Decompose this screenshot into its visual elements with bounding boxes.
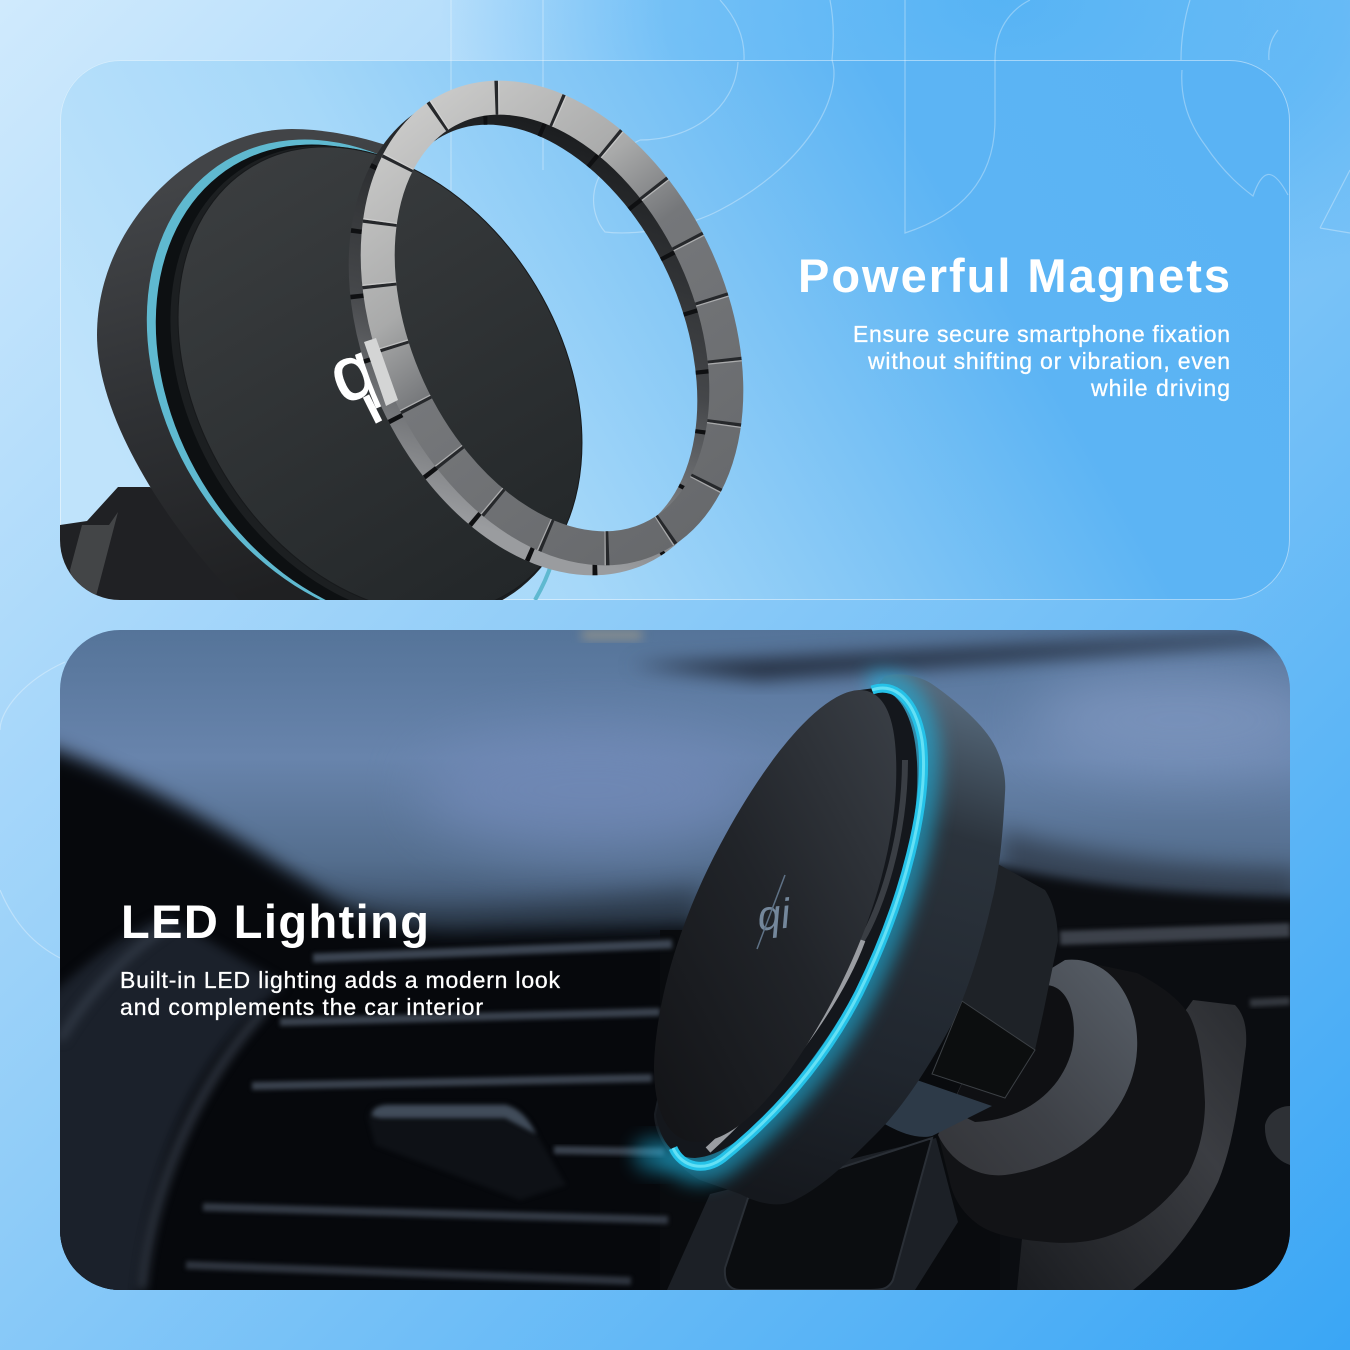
- ring outer wall: [349, 114, 710, 576]
- qi logo: [334, 352, 382, 424]
- mount back: [940, 1010, 1205, 1243]
- bright ring reflection: [364, 338, 398, 406]
- led ring: [146, 140, 377, 600]
- ball joint: [938, 960, 1137, 1175]
- description: without shifting or vibration, even: [867, 348, 1230, 374]
- inner dark ring: [156, 144, 350, 600]
- charger shell: [654, 674, 1005, 1204]
- description: while driving: [1090, 375, 1230, 401]
- mount wing: [1017, 1000, 1246, 1290]
- ring face: [360, 80, 744, 566]
- centre console: [667, 1138, 958, 1290]
- led lower right glimpse: [535, 562, 552, 600]
- description: [853, 321, 1230, 401]
- inner rim: [656, 688, 917, 1158]
- led spill: [633, 1137, 677, 1173]
- right knob: [1265, 1106, 1290, 1165]
- charger face: [178, 147, 582, 600]
- charger body: [97, 129, 384, 600]
- heading: LED Lighting: [121, 895, 429, 948]
- wall gaps: [350, 116, 709, 576]
- logo: qi: [755, 889, 794, 940]
- car interior photo: [40, 630, 1330, 1310]
- description: [120, 967, 560, 1020]
- product: magnetic charger disc: [60, 129, 582, 600]
- vent slats: [186, 930, 1290, 1281]
- left vent surround: [60, 914, 283, 1290]
- description: and complements the car interior: [120, 994, 483, 1020]
- segment gaps: [362, 80, 742, 566]
- panel outline lettering: [451, 60, 1288, 233]
- mount arm: [60, 487, 239, 600]
- area behind the product: [660, 930, 1000, 1300]
- ball inner: [950, 985, 1074, 1122]
- metal rim: [862, 760, 905, 940]
- segment highlights: [362, 80, 742, 566]
- background outline lettering: [0, 0, 1350, 958]
- product: LED charger: [633, 674, 1246, 1290]
- panel: powerful magnets: [60, 60, 1290, 600]
- led glow: [673, 688, 923, 1166]
- neck: [881, 1078, 992, 1137]
- description: Built-in LED lighting adds a modern look: [120, 967, 560, 993]
- magnet ring: [349, 80, 744, 576]
- led ring: [673, 688, 923, 1166]
- vent clip: [371, 1118, 561, 1197]
- logo: [755, 875, 794, 949]
- qi logo: qi: [317, 319, 403, 420]
- description: Ensure secure smartphone fixation: [853, 321, 1230, 347]
- panel: LED lighting: [40, 630, 1330, 1310]
- heading: Powerful Magnets: [798, 249, 1230, 302]
- octagon piece: [962, 864, 1058, 1050]
- charger face: [654, 690, 896, 1142]
